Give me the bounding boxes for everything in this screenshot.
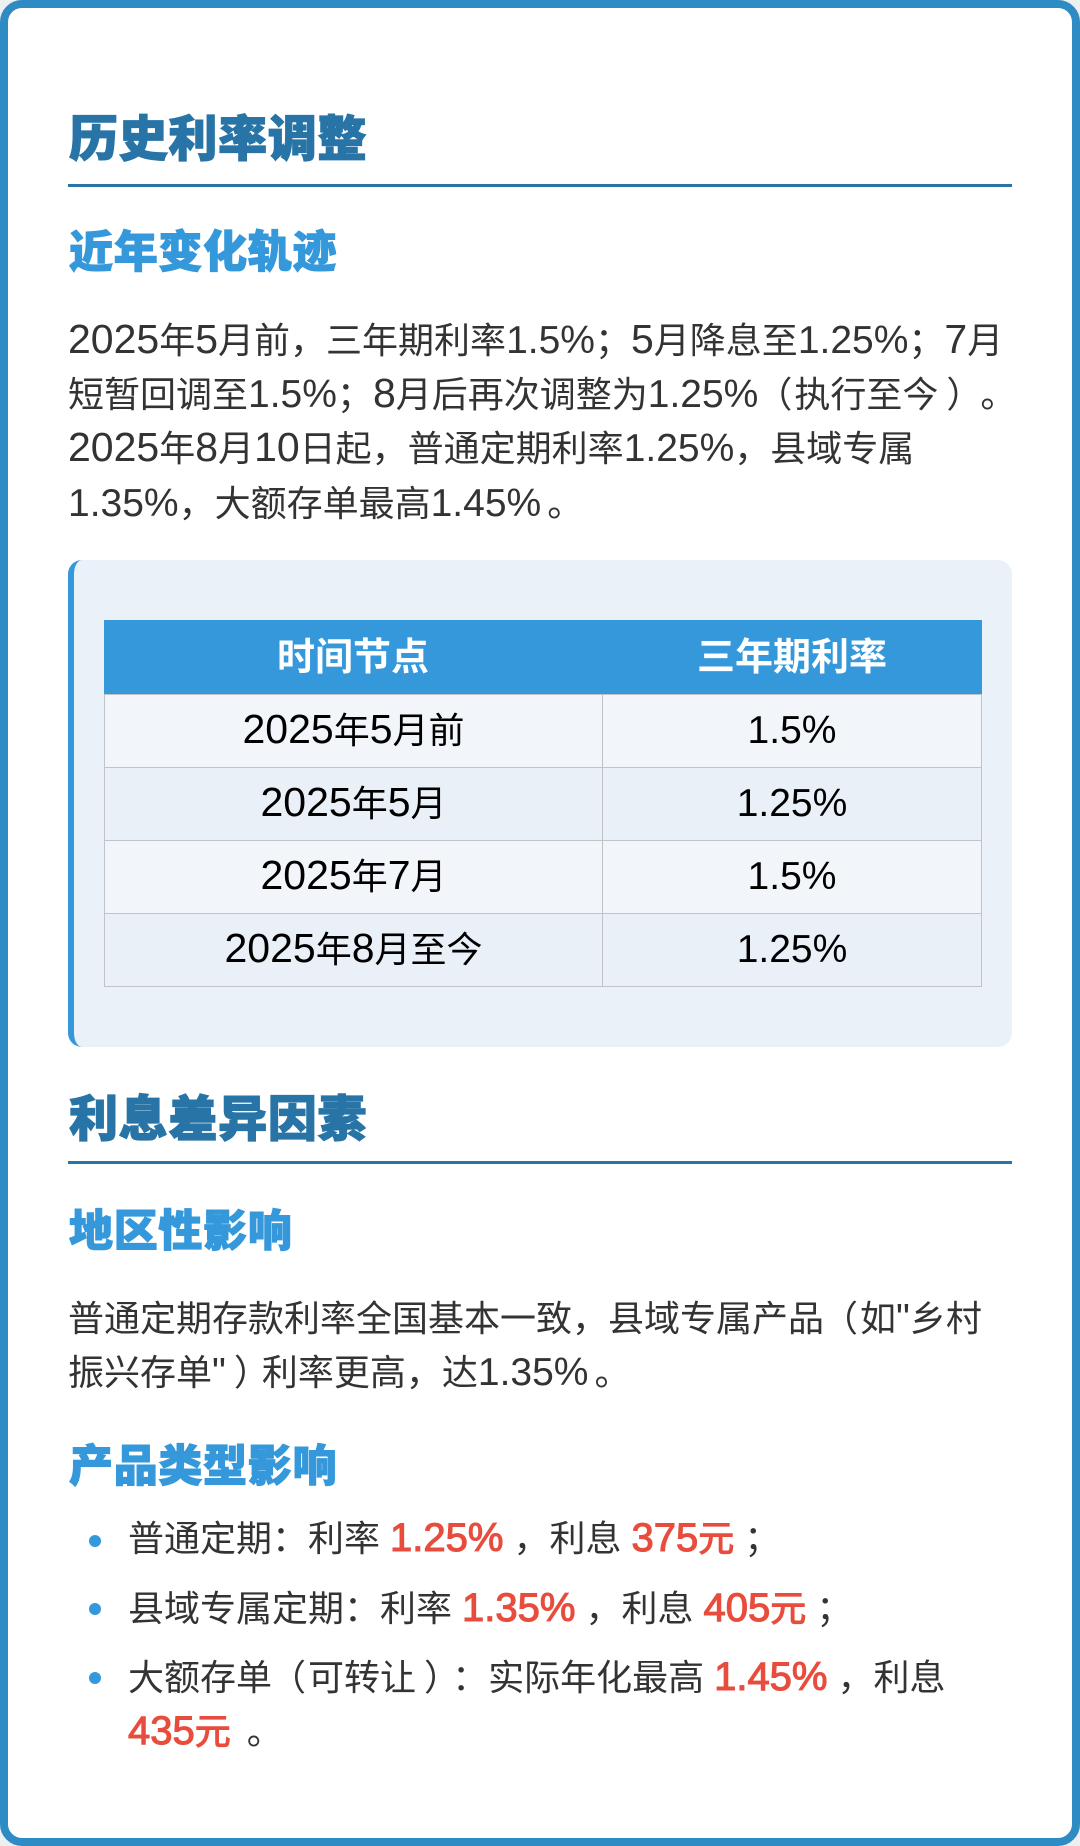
- table row 3: 1.5%: [748, 855, 836, 898]
- list item 3: [89, 1655, 946, 1753]
- table row 1: [104, 694, 982, 767]
- table row 3: 2025年7月: [260, 852, 447, 898]
- text block: rate history: [68, 316, 1016, 525]
- table header: 三年期利率: [697, 637, 887, 679]
- table row 1: 1.5%: [748, 709, 836, 752]
- list item 2: 县域专属定期：利率 1.35% ，利息 405元 ；: [128, 1586, 852, 1630]
- list item 3: 大额存单（可转让）：实际年化最高 1.45% ，利息: [128, 1655, 946, 1699]
- table row 4: 1.25%: [737, 928, 847, 971]
- list item 1: 普通定期：利率 1.25% ，利息 375元 ；: [128, 1516, 780, 1560]
- table header: [104, 620, 982, 694]
- table row 4: 2025年8月至今: [224, 925, 483, 971]
- heading: 利息差异因素: 利息差异因素: [69, 1080, 367, 1151]
- text block: regional impact: [68, 1297, 982, 1394]
- panel: rate table box: [68, 560, 1012, 1047]
- table header: 时间节点: [277, 637, 429, 679]
- list: product types: [89, 1516, 946, 1753]
- table row 2: 2025年5月: [260, 779, 447, 825]
- table: rate by time node: [104, 620, 982, 987]
- subheading: 近年变化轨迹: 近年变化轨迹: [69, 216, 337, 280]
- text block: regional impact: 普通定期存款利率全国基本一致，县域专属产品（如"乡村: [68, 1297, 982, 1340]
- text block: rate history: 短暂回调至1.5%；8月后再次调整为1.25%（执行至今）。: [68, 370, 1016, 416]
- subheading: 地区性影响: 地区性影响: [69, 1195, 292, 1259]
- text block: rate history: 1.35%，大额存单最高1.45%。: [68, 482, 583, 525]
- text block: rate history: 2025年5月前，三年期利率1.5%；5月降息至1.25%；7月: [68, 316, 1003, 362]
- text block: regional impact: 振兴存单"）利率更高，达1.35%。: [68, 1351, 631, 1394]
- table row 3: [104, 840, 982, 913]
- list item 3: 435元 。: [128, 1709, 283, 1753]
- table row 1: 2025年5月前: [242, 706, 465, 752]
- text block: rate history: 2025年8月10日起，普通定期利率1.25%，县域专属: [68, 424, 914, 470]
- table row 4: [104, 913, 982, 987]
- subheading: 产品类型影响: 产品类型影响: [69, 1430, 337, 1494]
- table row 2: 1.25%: [737, 782, 847, 825]
- heading: 历史利率调整: 历史利率调整: [69, 100, 367, 171]
- table row 2: [104, 767, 982, 840]
